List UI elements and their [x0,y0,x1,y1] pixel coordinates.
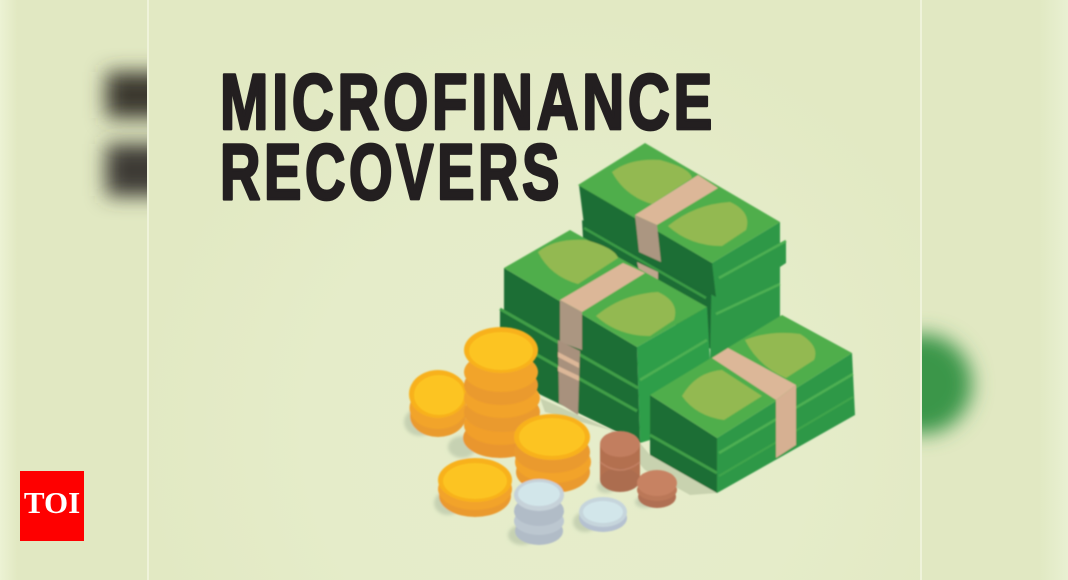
gold coin stack: front [438,458,512,517]
silver single coin [579,497,627,532]
silver coin stack [514,479,564,545]
title: RECOVERS [220,127,563,216]
ground shadow under banknotes [540,398,717,495]
blurred left background title [106,72,176,196]
gold coin stack: middle [514,414,591,493]
coin shadows [404,408,655,545]
TOI logo [20,471,84,541]
illustration: coins [404,327,677,545]
top banknote stack [578,143,786,360]
blurred right background money [922,318,988,450]
gold coin stack: left [409,370,467,437]
right banknote stack [650,315,855,493]
copper coin stack: small [637,470,677,508]
illustration: stacks of banknotes [500,143,855,495]
gold coin stack: tall [463,327,540,458]
title: MICROFINANCE [220,57,716,146]
middle banknote stack [500,230,710,443]
TOI logo: TOI [24,485,80,520]
copper coin stack: tall [600,431,640,492]
title [220,57,716,216]
